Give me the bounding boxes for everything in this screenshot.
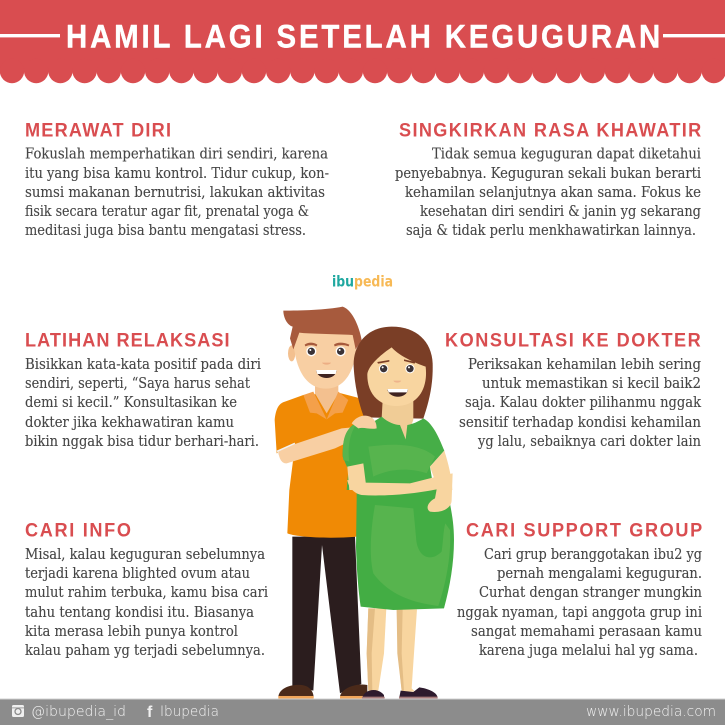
text block: merawat diri: Fokuslah memperhatikan diri sendiri, karena <box>25 144 328 162</box>
text block: konsultasi ke dokter: untuk memastikan si kecil baik2 <box>482 374 701 392</box>
heading: cari info: CARI INFO <box>25 519 131 541</box>
heading: merawat diri: MERAWAT DIRI <box>25 119 171 141</box>
heading: konsultasi ke dokter: KONSULTASI KE DOKTER <box>445 329 701 351</box>
panel: latihan relaksasi <box>25 329 261 450</box>
footer text: facebook handle: Ibupedia <box>160 704 219 720</box>
text block: latihan relaksasi: Bisikkan kata-kata positif pada diri <box>25 355 261 373</box>
heading: latihan relaksasi: LATIHAN RELAKSASI <box>25 329 230 351</box>
text block: cari info: kalau paham yg terjadi sebelumnya. <box>25 641 265 659</box>
icon: instagram <box>12 705 24 717</box>
text block: latihan relaksasi: demi si kecil.” Konsultasikan ke <box>25 393 237 411</box>
panel: cari support group <box>457 519 702 659</box>
text block: cari info <box>25 545 268 659</box>
text block: cari support group: pernah mengalami keguguran. <box>497 564 702 582</box>
panel: cari info <box>25 519 268 659</box>
text block: latihan relaksasi: dokter jika kekhawatiran kamu <box>25 413 234 431</box>
woman lower body <box>356 480 454 699</box>
title: HAMIL LAGI SETELAH KEGUGURAN <box>66 18 660 55</box>
text block: merawat diri <box>25 144 329 239</box>
header banner <box>0 0 725 83</box>
text block: cari support group: karena juga melalui hal yg sama. <box>479 641 698 659</box>
text block: singkirkan rasa khawatir <box>395 144 701 239</box>
text block: merawat diri: sumsi makanan bernutrisi, lakukan aktivitas <box>25 183 325 201</box>
woman arm and hand <box>347 473 453 512</box>
text block: latihan relaksasi <box>25 355 261 450</box>
text block: latihan relaksasi: sendiri, seperti, “Saya harus sehat <box>25 374 250 392</box>
man arm <box>278 427 360 463</box>
panel: konsultasi ke dokter <box>445 329 702 450</box>
man hand on shoulder <box>352 416 377 429</box>
footer text: website: www.ibupedia.com <box>586 704 716 720</box>
text block: konsultasi ke dokter: Periksakan kehamilan lebih sering <box>468 355 701 373</box>
logo: ibupedia: ibupedia <box>332 272 393 290</box>
footer text: instagram handle: @ibupedia_id <box>31 704 126 720</box>
man upper body <box>275 307 367 538</box>
heading: cari support group: CARI SUPPORT GROUP <box>466 519 702 541</box>
text block: merawat diri: meditasi juga bisa bantu mengatasi stress. <box>25 221 306 239</box>
text block: cari info: terjadi karena blighted ovum atau <box>25 564 250 582</box>
text block: cari info: mulut rahim terbuka, kamu bisa cari <box>25 583 268 601</box>
text block: merawat diri: fisik secara teratur agar fit, prenatal yoga & <box>25 202 309 220</box>
text block: merawat diri: itu yang bisa kamu kontrol. Tidur cukup, kon- <box>25 164 329 182</box>
man lower body and shoes <box>278 537 367 700</box>
text block: cari info: kita merasa lebih punya kontrol <box>25 622 238 640</box>
illustration: couple <box>275 307 454 700</box>
panel: singkirkan rasa khawatir <box>395 119 702 239</box>
text block: latihan relaksasi: bikin nggak bisa tidur berhari-hari. <box>25 432 259 450</box>
heading: singkirkan rasa khawatir: SINGKIRKAN RASA KHAWATIR <box>399 119 702 141</box>
footer bar <box>0 698 725 725</box>
text block: cari support group <box>457 545 702 659</box>
text block: konsultasi ke dokter: sensitif terhadap kondisi kehamilan <box>459 413 701 431</box>
icon: facebook: f <box>147 704 153 721</box>
text block: konsultasi ke dokter <box>459 355 702 450</box>
text block: cari info: Misal, kalau keguguran sebelumnya <box>25 545 265 563</box>
text block: cari info: tahu tentang kondisi itu. Biasanya <box>25 603 254 621</box>
panel: merawat diri <box>25 119 329 239</box>
text block: cari support group: sangat memahami perasaan kamu <box>471 622 702 640</box>
woman upper body <box>343 327 452 490</box>
